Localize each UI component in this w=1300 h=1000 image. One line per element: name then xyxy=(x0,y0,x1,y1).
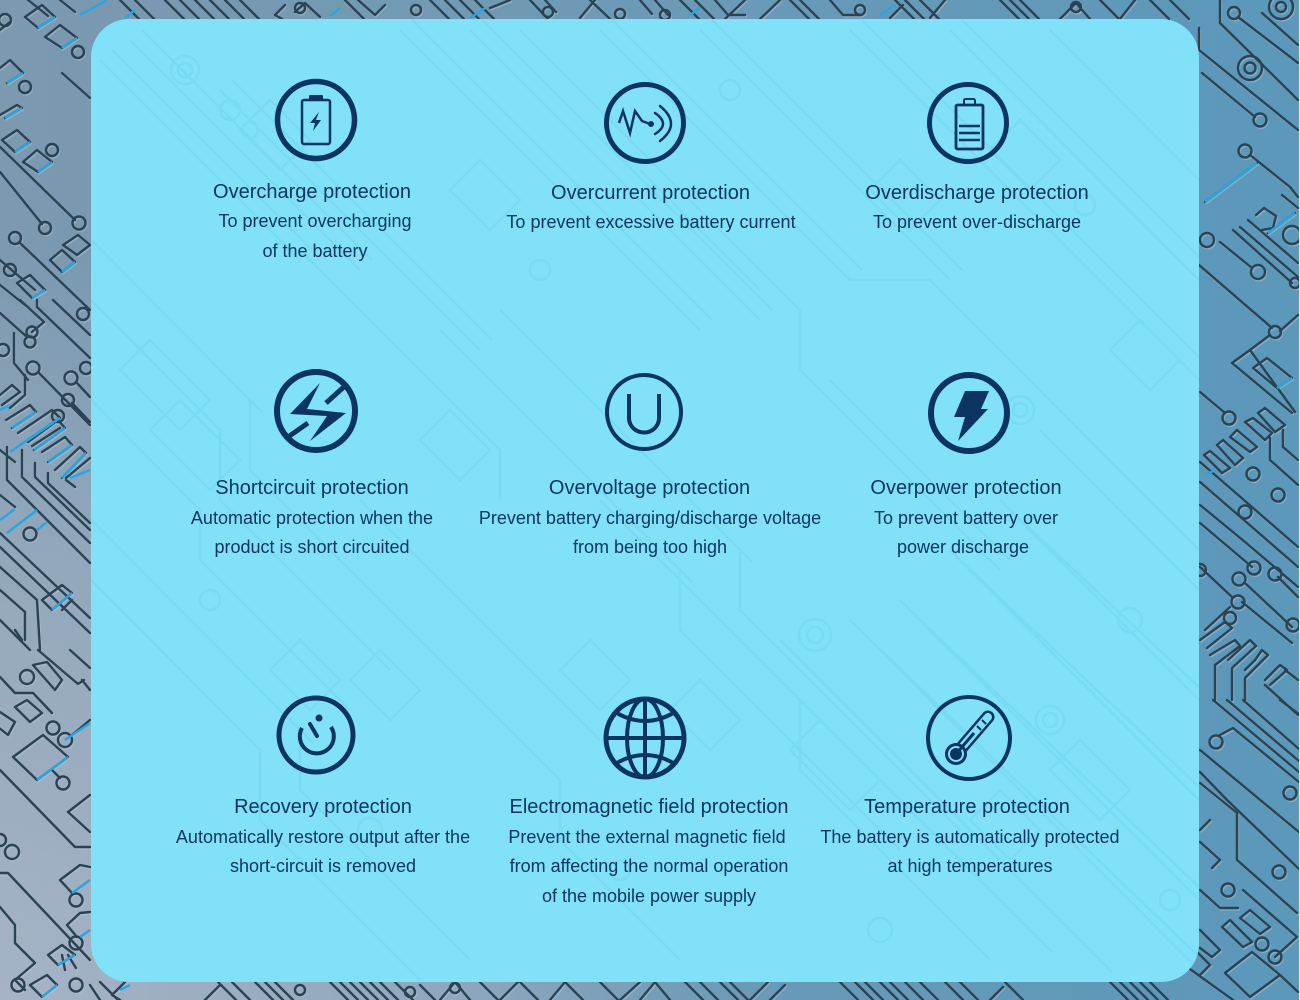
item: electromagnetic field protection xyxy=(508,696,789,906)
item: overpower protection xyxy=(870,372,1062,557)
description: To prevent over-discharge xyxy=(873,212,1081,232)
description: To prevent excessive battery current xyxy=(506,212,796,232)
item: overcharge protection xyxy=(213,78,412,261)
description line 1: Prevent battery charging/discharge voltage xyxy=(479,508,821,528)
icon: pulse wave xyxy=(604,82,686,164)
icon: thermometer xyxy=(926,695,1012,781)
description line 1: To prevent battery over xyxy=(874,508,1058,528)
description line 2: from affecting the normal operation xyxy=(510,856,788,876)
item: overdischarge protection xyxy=(865,82,1089,232)
description line 1: To prevent overcharging xyxy=(218,211,412,231)
description line 1: Prevent the external magnetic field xyxy=(508,827,786,847)
description line 3: of the mobile power supply xyxy=(542,886,756,906)
icon: power restart xyxy=(276,696,356,774)
icon: lightning bolt xyxy=(928,372,1010,454)
description line 2: at high temperatures xyxy=(887,856,1053,876)
item: shortcircuit protection xyxy=(191,369,433,557)
item: overcurrent protection xyxy=(506,82,796,232)
title: Overpower protection xyxy=(870,477,1062,499)
description line 2: product is short circuited xyxy=(214,537,410,557)
icon: battery with bolt xyxy=(274,78,358,162)
icon: globe xyxy=(604,696,686,780)
icon: crossed lightning xyxy=(274,369,358,453)
icon: low battery xyxy=(927,82,1009,164)
description line 2: from being too high xyxy=(573,537,727,557)
title: Overcurrent protection xyxy=(551,182,750,204)
title: Overcharge protection xyxy=(213,181,411,203)
description line 1: Automatically restore output after the xyxy=(176,827,470,847)
description line 2: short-circuit is removed xyxy=(230,856,416,876)
description line 1: The battery is automatically protected xyxy=(820,827,1120,847)
icon: letter U xyxy=(605,373,683,451)
description line 2: of the battery xyxy=(262,241,368,261)
title: Overvoltage protection xyxy=(549,477,750,499)
description line 1: Automatic protection when the xyxy=(191,508,433,528)
title: Temperature protection xyxy=(864,796,1070,818)
description line 2: power discharge xyxy=(897,537,1029,557)
item: temperature protection xyxy=(820,695,1120,876)
item: recovery protection xyxy=(176,696,470,876)
title: Shortcircuit protection xyxy=(215,477,409,499)
item: overvoltage protection xyxy=(479,373,821,557)
title: Recovery protection xyxy=(234,796,412,818)
title: Electromagnetic field protection xyxy=(509,796,789,818)
title: Overdischarge protection xyxy=(865,182,1089,204)
